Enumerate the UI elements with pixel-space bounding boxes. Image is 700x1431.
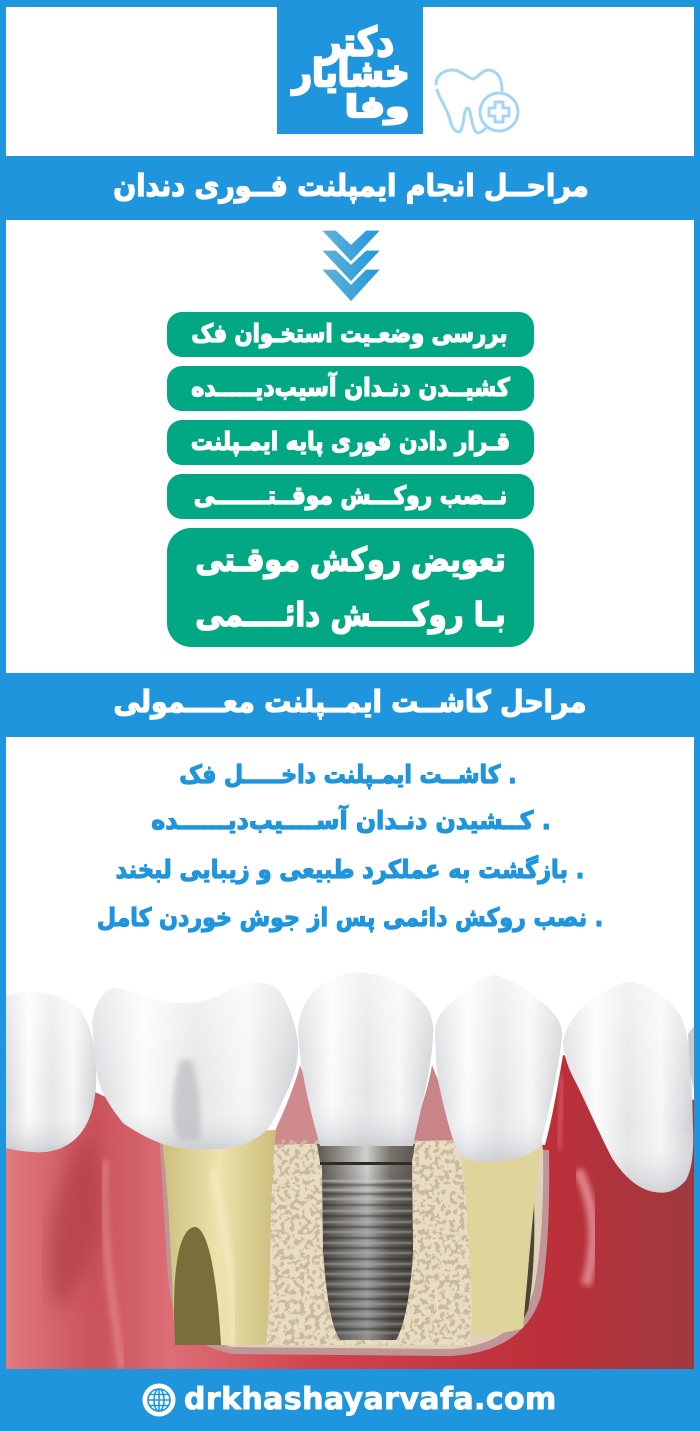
step pill 2 [167,366,534,411]
step pill 2: کشیــدن دنـدان آسیب‌دیـــــده [191,373,510,402]
step pill 3: قـرار دادن فوری پایه ایمـپلنت [191,427,510,456]
implant: threaded screw [320,1165,414,1341]
step pill 4: نــصب روکـــش موقــتـــــــی [194,481,507,510]
frame: left border [0,0,6,1431]
website address: drkhashayarvafa.com [184,1382,557,1417]
pill line 1: تعویض روکش موقـتی [195,540,506,579]
pocket interior [166,1130,543,1349]
tooth: canine crown [435,975,562,1162]
pill line 2: بـا روکــــش دائــــمی [195,595,506,634]
heading band: immediate implant steps [0,156,700,220]
logo: blue block with clinic name: خشایار [292,52,409,96]
implant: abutment collar [317,1144,415,1165]
gum: pink collar beside implant [268,1065,330,1146]
molar root [162,1130,276,1345]
frame: top border [0,0,700,7]
list item 4: . نصب روکش دائمی پس از جوش خوردن کامل [97,903,603,932]
icon: globe [142,1384,176,1416]
frame: right border [694,0,700,1431]
step pill 5 [167,528,534,647]
illustration: teeth and dental implant cross-section [6,972,694,1369]
tooth: far right sliver [688,1026,694,1090]
list item 2: . کــشیدن دنـدان آســــیب‌دیــــــده [151,806,551,835]
footer band [0,1369,700,1431]
gum: full gingiva [6,1055,694,1369]
icon: triple chevron arrow [322,230,380,301]
tooth: right incisor crown [563,982,693,1193]
logo: blue block with clinic name: وفا [345,90,409,125]
dark gap right of canine root [522,1175,534,1322]
heading text: مراحــل انجام ایمپلنت فــوری دندان [113,169,589,204]
heading band: conventional implant steps [0,673,700,737]
list: conventional steps [97,760,603,933]
list item 3: . بازگشت به عملکرد طبیعی و زیبایی لبخند [116,855,584,884]
canine root [460,1150,540,1335]
logo: blue block with clinic name: دکتر [322,20,394,66]
gum: pocket lining [160,1130,549,1356]
tooth: molar crown [92,983,298,1149]
heading text: مراحل کاشــت ایمــپلنت معــــمولی [114,685,586,720]
tooth: far left [6,992,96,1152]
step pill 3 [167,420,534,465]
step pill 1 [167,312,534,357]
step pill 4 [167,474,534,519]
list item 1: . کاشــت ایمـپلنت داخـــــل فک [179,760,517,789]
logo: blue block with clinic name [277,0,423,134]
step pill 1: بررسی وضعـیت استخـوان فک [191,319,507,348]
tooth: implant crown [298,973,433,1146]
icon: tooth with plus [434,68,520,134]
bone: spongy texture [266,1140,472,1345]
gum: pink collar right of implant [410,1065,462,1144]
